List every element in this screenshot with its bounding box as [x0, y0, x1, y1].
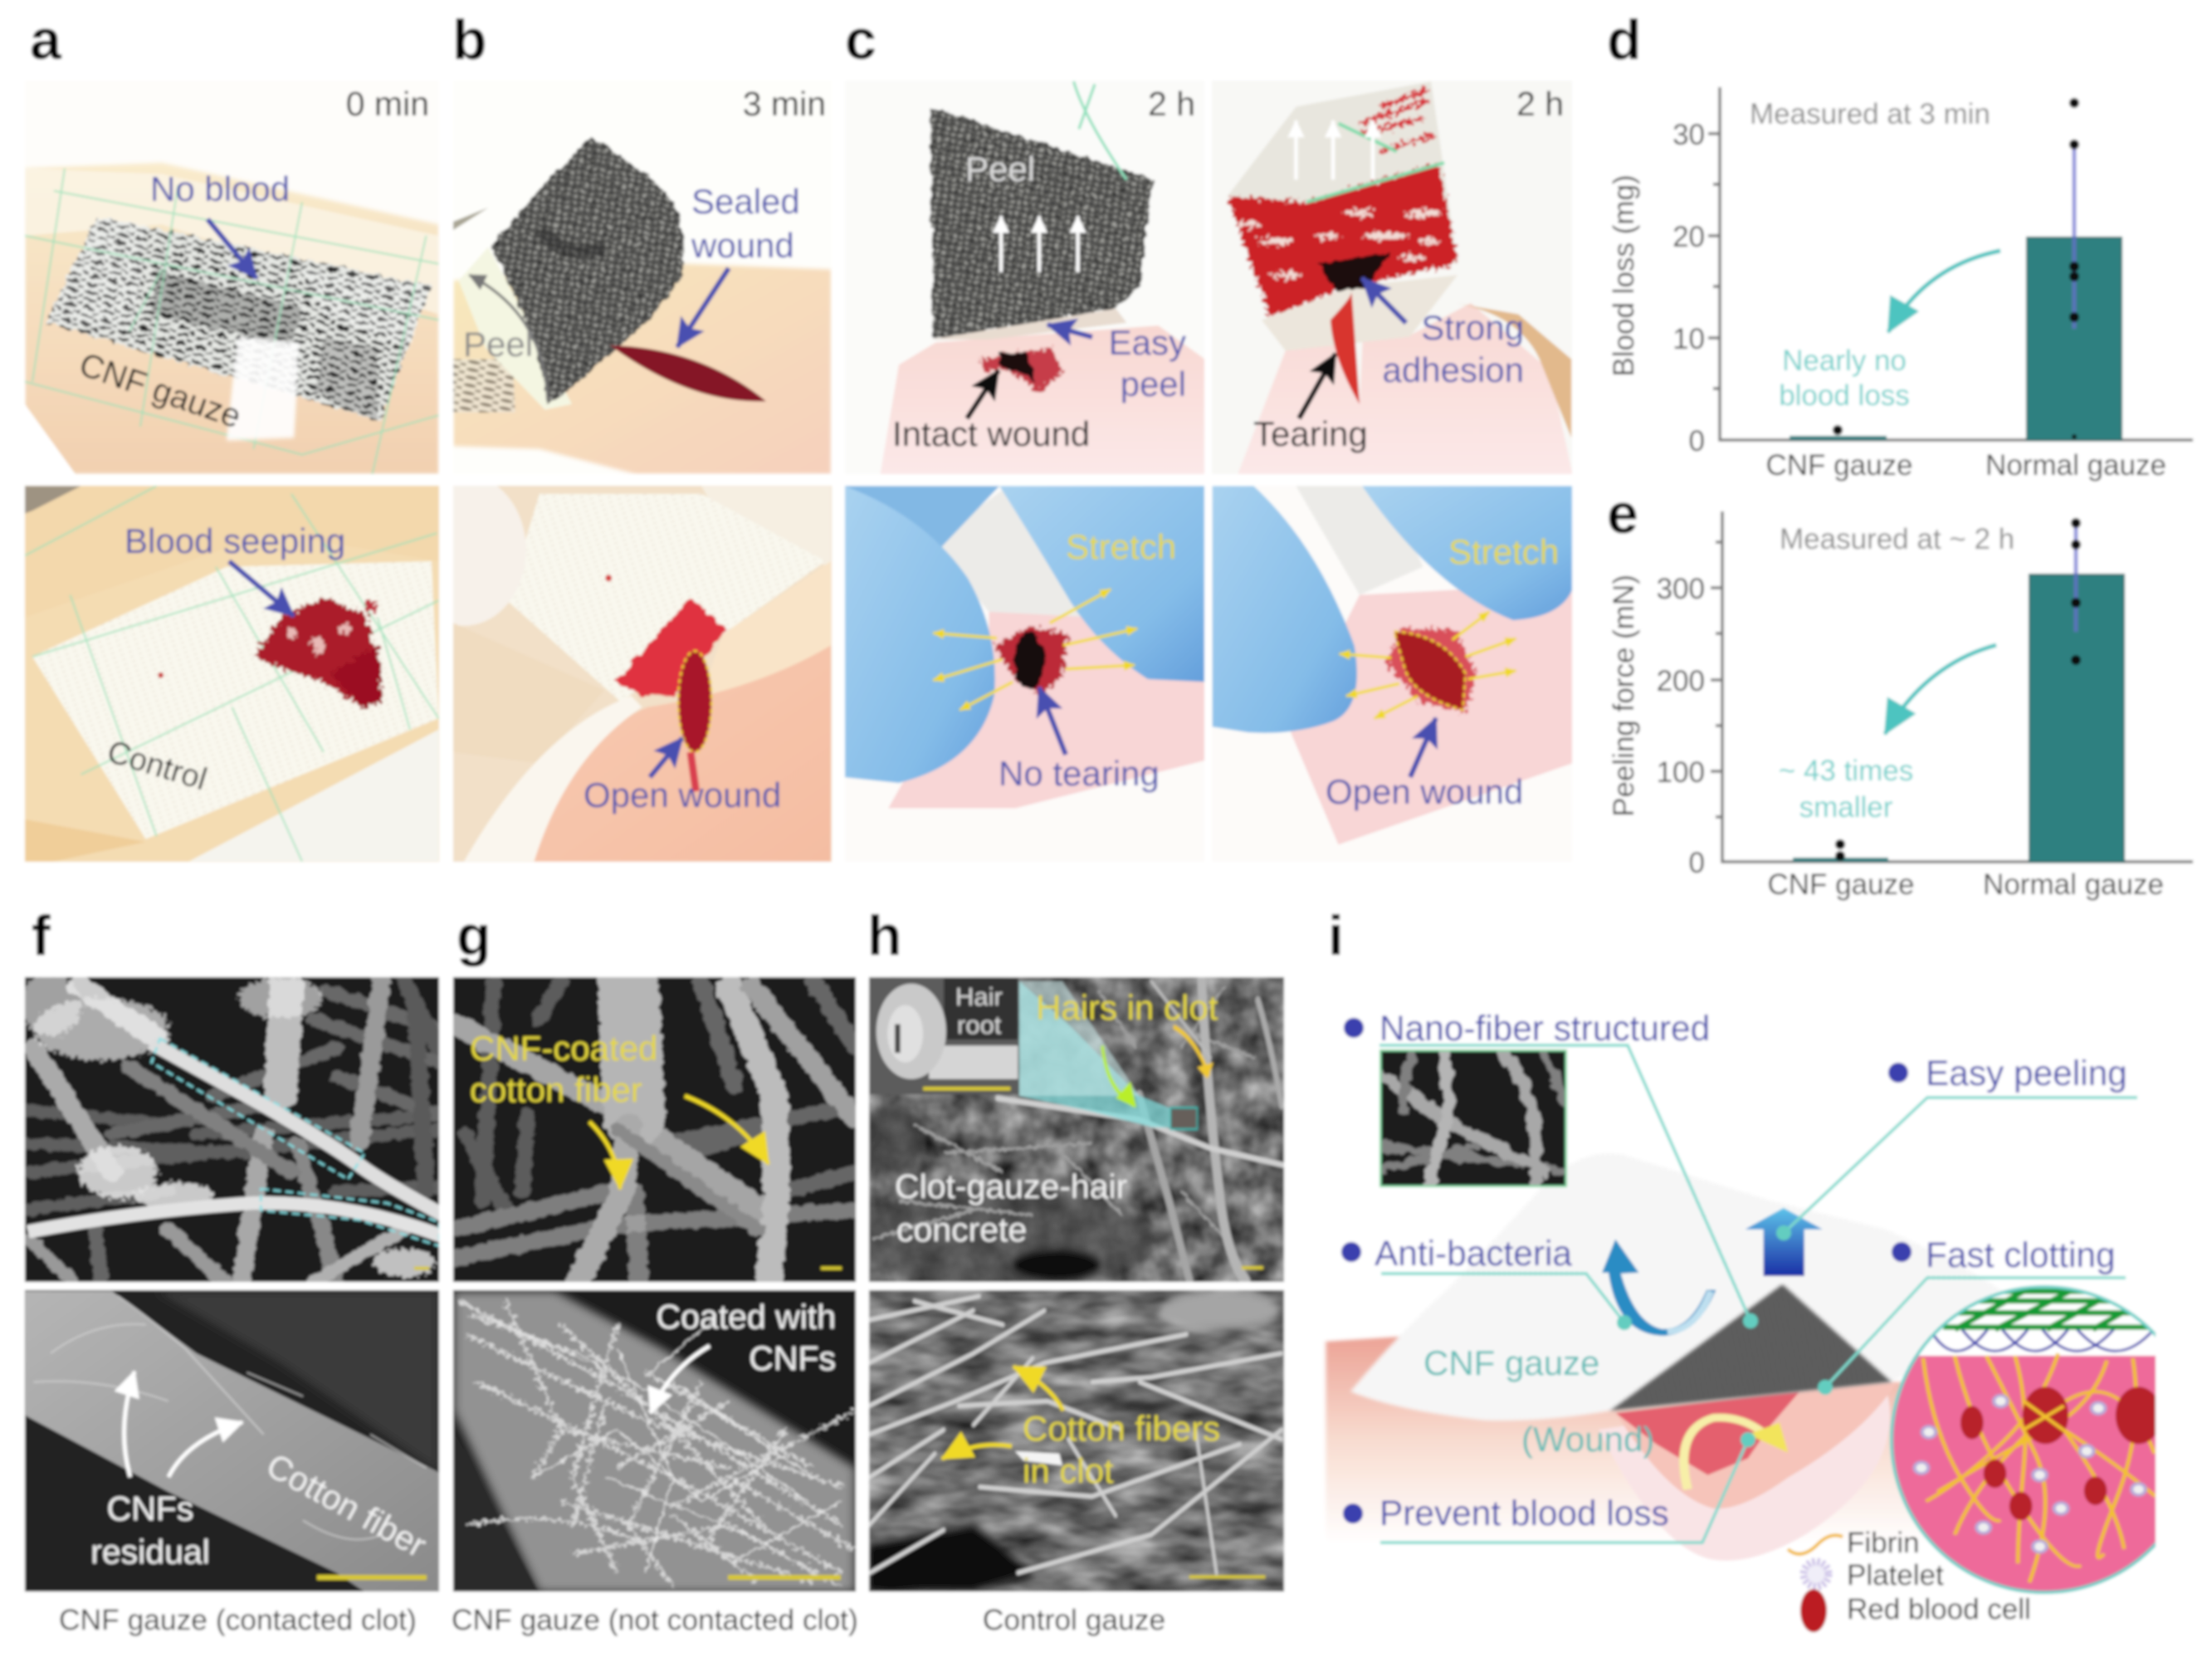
annotation: Strong adhesion: adhesion	[1383, 350, 1524, 389]
tick labels: 300	[1657, 573, 1705, 605]
panel f: SEM CNF gauze contacted clot	[20, 904, 443, 1636]
annotation: Open wound: Open wound	[584, 775, 781, 814]
annotation: CNF-coated cotton fiber: cotton fiber	[470, 1070, 642, 1109]
callout: anti-bacteria	[1341, 1234, 1632, 1330]
tick labels: 10	[1672, 323, 1705, 355]
x labels	[1765, 449, 2166, 482]
note: 43 times smaller	[1779, 755, 1913, 824]
panel e: peeling force bar chart	[1607, 482, 2193, 901]
label Hairs in clot: Hairs in clot	[1036, 988, 1218, 1027]
panel b: peeling at 3 min	[452, 17, 833, 863]
scale bar	[317, 1575, 427, 1580]
annotation: Intact wound	[892, 370, 1090, 453]
label Hair root: Hair	[955, 982, 1003, 1011]
panel d: blood loss bar chart	[1607, 8, 2193, 482]
label Control: Control	[103, 734, 211, 797]
label Peel: Peel	[463, 325, 533, 364]
panel h: SEM control gauze	[855, 904, 1284, 1636]
y axis title: Peeling force (mN)	[1608, 575, 1640, 817]
note: nearly no blood loss: blood loss	[1779, 379, 1910, 412]
SEM image top	[20, 974, 443, 1282]
bar: normal gauze	[2027, 237, 2122, 440]
annotation: Cotton fibers in clot: in clot	[1023, 1451, 1114, 1490]
annotation: No tearing	[999, 687, 1160, 793]
panel a: CNF gauze and control at 0 min	[25, 8, 439, 862]
callout: prevent blood loss	[1343, 1432, 1755, 1543]
annotation: CNF-coated cotton fiber: CNF-coated	[470, 1029, 657, 1068]
callout: fast clotting	[1818, 1235, 2126, 1395]
annotation: Easy peel	[1047, 323, 1186, 403]
annotation: Blood seeping	[125, 521, 345, 616]
y axis title: Blood loss (mg)	[1608, 174, 1640, 377]
label Clot-gauze-hair concrete: concrete	[896, 1210, 1027, 1249]
SEM image top	[855, 977, 1284, 1291]
tick labels	[1672, 119, 1705, 457]
callout: nano-fiber structured	[1344, 1009, 1758, 1328]
label Hair root: root	[957, 1010, 1002, 1039]
note: nearly no blood loss: Nearly no	[1782, 345, 1907, 377]
annotation: Coated with CNFs: Coated with	[656, 1298, 836, 1336]
scale bar	[728, 1575, 841, 1580]
label g: g	[457, 904, 491, 967]
SEM image bottom	[453, 1290, 856, 1592]
x labels: Normal gauze	[1983, 868, 2164, 901]
label e: e	[1607, 482, 1638, 545]
note: nearly no blood loss	[1779, 345, 1910, 412]
annotations: CNFs residual: CNFs	[107, 1489, 193, 1528]
callout: anti-bacteria: Anti-bacteria	[1375, 1234, 1572, 1273]
bar: CNF gauze	[1790, 436, 1887, 440]
label 0 min: 0 min	[346, 85, 429, 123]
callout: fast clotting: Fast clotting	[1926, 1235, 2116, 1274]
magnified clot circle	[1886, 1287, 2197, 1604]
label c: c	[845, 8, 876, 71]
tick labels: 0	[1689, 847, 1705, 879]
axes and ticks	[1711, 511, 2193, 862]
x labels	[1767, 868, 2164, 901]
photo: CNF gauze peeled	[452, 135, 833, 475]
annotation: Sealed wound: Sealed	[691, 182, 800, 221]
tick labels: 30	[1672, 119, 1705, 151]
tick labels: 0	[1689, 425, 1705, 457]
legend: Red blood cell	[1847, 1593, 2031, 1626]
annotation: Open wound right: Open wound	[1326, 772, 1523, 811]
x labels: CNF gauze	[1767, 868, 1915, 901]
annotation: Coated with CNFs: CNFs	[749, 1339, 836, 1377]
label 2 h right: 2 h	[1516, 85, 1564, 123]
label Cotton fiber: Cotton fiber	[261, 1446, 432, 1565]
illustration: CNF gauze sheet	[1350, 1153, 2024, 1421]
label Stretch right: Stretch	[1448, 532, 1559, 571]
caption h: Control gauze	[983, 1603, 1165, 1636]
icon: up arrow easy peeling	[1745, 1208, 1823, 1276]
legend: Fibrin	[1847, 1527, 1920, 1559]
annotation: CNF-coated cotton fiber	[470, 1029, 769, 1189]
x labels: CNF gauze	[1765, 449, 1913, 482]
annotation: Coated with CNFs	[651, 1298, 836, 1413]
label wound: (Wound)	[1521, 1420, 1654, 1459]
annotation: Open wound	[584, 738, 781, 814]
fibrin fibers	[1923, 1353, 2156, 1582]
note: 43 times smaller: smaller	[1799, 791, 1893, 824]
tick labels: 20	[1672, 221, 1705, 253]
icon: curved blue arrow	[1604, 1243, 1713, 1334]
annotation: Strong adhesion	[1362, 278, 1524, 389]
legend	[1788, 1527, 2031, 1632]
SEM image top	[453, 977, 856, 1282]
photo: stretched wound right	[1212, 486, 1572, 862]
x labels: Normal gauze	[1985, 449, 2166, 482]
photo: control gauze open wound	[452, 485, 833, 863]
label Clot-gauze-hair concrete: Clot-gauze-hair	[895, 1167, 1127, 1206]
arrow	[1888, 251, 2000, 332]
tick labels	[1657, 573, 1705, 879]
annotation: Easy peel: peel	[1121, 364, 1186, 403]
bar: normal gauze	[2029, 575, 2124, 862]
panel i: schematic of CNF gauze	[1326, 904, 2197, 1632]
annotation: Tearing	[1253, 354, 1368, 453]
annotation: Sealed wound	[677, 182, 800, 347]
note: 43 times smaller: ~ 43 times	[1779, 755, 1913, 787]
callout: easy peeling	[1776, 1054, 2137, 1240]
note: measured at 2 h: Measured at ~ 2 h	[1780, 523, 2014, 555]
annotations: CNFs residual	[90, 1372, 242, 1571]
annotation: Tearing: Tearing	[1253, 414, 1368, 453]
error bar and points	[1835, 518, 2081, 861]
annotation: No blood: No blood	[150, 169, 290, 208]
label Hair root	[955, 982, 1003, 1039]
tick labels: 100	[1657, 756, 1705, 789]
green gauze mesh	[1943, 1291, 2156, 1329]
label CNF gauze: CNF gauze	[1423, 1343, 1599, 1382]
caption f: CNF gauze (contacted clot)	[59, 1603, 417, 1636]
red blood cells	[1961, 1386, 2161, 1520]
photo: CNF gauze peeled at 2 h	[845, 81, 1205, 474]
annotations: CNFs residual: residual	[90, 1533, 210, 1571]
label a: a	[30, 8, 62, 71]
annotation: No tearing: No tearing	[999, 754, 1160, 793]
caption g: CNF gauze (not contacted clot)	[452, 1603, 858, 1636]
bar: CNF gauze	[1793, 858, 1888, 862]
illustration: skin and wound	[1326, 1337, 1943, 1561]
annotation: No blood	[150, 169, 290, 278]
error bar and points	[1833, 98, 2079, 439]
axes and ticks	[1708, 87, 2193, 440]
annotation: Intact wound: Intact wound	[892, 414, 1090, 453]
label 3 min: 3 min	[743, 85, 826, 123]
label Clot-gauze-hair concrete	[895, 1167, 1127, 1249]
label CNF gauze: CNF gauze	[75, 346, 246, 435]
label Stretch left: Stretch	[1066, 527, 1176, 566]
label i: i	[1328, 904, 1344, 967]
callout: nano-fiber structured: Nano-fiber structured	[1379, 1009, 1710, 1048]
platelets	[1915, 1396, 2146, 1553]
arrow	[1885, 645, 1996, 734]
label d: d	[1607, 8, 1642, 71]
inset: SEM micrograph	[1379, 1049, 1567, 1187]
photo: CNF gauze on skin	[23, 159, 440, 475]
panel c: peel and stretch at 2 h	[845, 8, 1572, 862]
SEM image bottom	[869, 1290, 1284, 1592]
annotation: Cotton fibers in clot: Cotton fibers	[1023, 1409, 1220, 1448]
annotation: Easy peel: Easy	[1109, 323, 1186, 362]
annotation: Sealed wound: wound	[691, 226, 794, 265]
note: measured at 3 min: Measured at 3 min	[1750, 98, 1990, 130]
callout: prevent blood loss: Prevent blood loss	[1379, 1494, 1669, 1533]
tick labels: 200	[1657, 665, 1705, 697]
label Peel white: Peel	[965, 149, 1035, 188]
callout: easy peeling: Easy peeling	[1926, 1054, 2127, 1093]
annotation: Strong adhesion: Strong	[1421, 308, 1524, 347]
photo: stretched wound left	[843, 484, 1206, 810]
icon: yellow curved arrow	[1684, 1417, 1788, 1489]
photo: control gauze with blood	[25, 486, 439, 862]
label 2 h left: 2 h	[1148, 85, 1195, 123]
blue CNF arcs	[1929, 1328, 2156, 1351]
SEM image bottom	[25, 1290, 439, 1592]
annotation: Cotton fibers in clot	[942, 1367, 1220, 1490]
annotation: Open wound right	[1326, 718, 1523, 811]
legend: Platelet	[1847, 1559, 1944, 1592]
photo: control gauze peeled at 2 h	[1212, 81, 1572, 474]
label b: b	[452, 8, 487, 71]
panel g: SEM CNF gauze not contacted clot	[452, 904, 858, 1636]
label h: h	[867, 904, 902, 967]
label f: f	[32, 904, 51, 967]
annotation: Blood seeping: Blood seeping	[125, 521, 345, 560]
